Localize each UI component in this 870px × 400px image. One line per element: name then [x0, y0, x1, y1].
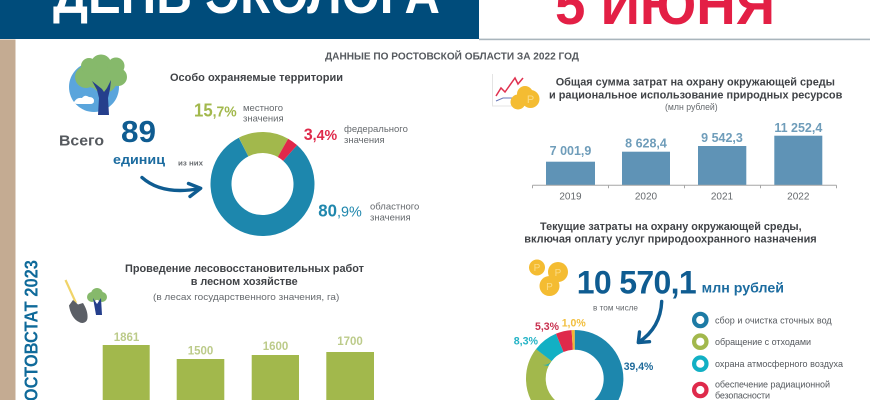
total label: Всего [59, 132, 104, 150]
bar chart: reforestation [103, 332, 374, 400]
heading: Особо охраняемые территории [170, 72, 343, 84]
bar chart: costs by year: 2020 [635, 192, 658, 202]
bar chart: costs by year: 2019 [559, 192, 582, 202]
panel: total environmental costs [492, 74, 843, 202]
subtitle: ДАННЫЕ ПО РОСТОВСКОЙ ОБЛАСТИ ЗА 2022 ГОД [325, 50, 579, 62]
donut labels: 8,3% [514, 335, 538, 347]
heading: включая оплату услуг природоохранного назначения [524, 234, 817, 246]
bar chart: costs by year: 2022 [787, 192, 810, 202]
bar chart: costs by year: 7 001,9 [550, 144, 591, 158]
label: regional 80,9%: 80,9% [318, 201, 362, 221]
heading: Проведение лесовосстановительных работ [125, 263, 365, 275]
unit note: (в лесах государственного значения, га) [153, 292, 339, 303]
legend [694, 314, 843, 400]
label: federal text: значения [344, 135, 385, 146]
heading: в лесном хозяйстве [191, 276, 298, 288]
heading: Текущие затраты на охрану окружающей среды, [540, 221, 802, 233]
donut chart: cost structure [520, 324, 629, 400]
small note: из них [178, 159, 204, 168]
bar chart: reforestation: 1700 [337, 336, 363, 348]
legend: обращение с отходами [715, 337, 811, 347]
panel: current costs [514, 221, 843, 400]
label: regional text: значения [370, 213, 411, 224]
bar chart: costs by year: 11 252,4 [774, 121, 822, 135]
icon: coins: Р [534, 263, 541, 274]
icon: shovel and tree [66, 280, 107, 323]
donut labels: 39,4% [624, 361, 653, 373]
note: в том числе [593, 303, 638, 313]
donut labels: 1,0% [562, 318, 586, 330]
panel: reforestation [66, 263, 374, 400]
bar chart: costs by year: 9 542,3 [701, 131, 743, 145]
icon: tree on globe [69, 54, 127, 115]
heading [549, 76, 843, 101]
arrow to donut [142, 178, 201, 196]
icon: chart and coins: Р [527, 94, 534, 106]
donut chart: protected territories [204, 125, 321, 243]
donut labels: 5,3% [535, 321, 559, 333]
icon: coins: Р [546, 282, 553, 293]
bar chart: costs by year: 2021 [711, 192, 734, 202]
panel: protected territories [59, 54, 419, 243]
legend: охрана атмосферного воздуха [715, 359, 843, 369]
unit note: (млн рублей) [665, 102, 718, 112]
bar chart: costs by year [532, 121, 836, 202]
big value: 10 570,1 [577, 264, 697, 300]
bar chart: reforestation: 1600 [263, 341, 288, 353]
label: regional text: областного [370, 202, 419, 212]
side stripe [0, 40, 16, 400]
bar chart: reforestation: 1500 [188, 346, 213, 358]
label: federal text: федерального [344, 124, 408, 135]
total value: 89 [121, 114, 156, 149]
label: federal 3,4%: 3,4% [304, 125, 337, 144]
label: local text: местного [243, 103, 283, 114]
value unit: млн рублей [702, 280, 784, 296]
legend: обеспечение радиационной [715, 380, 830, 390]
bar chart: reforestation: 1861 [114, 332, 140, 344]
label: local 15,7%: 15,7% [194, 101, 237, 121]
icon: coins: Р [555, 268, 562, 279]
heading [125, 263, 365, 288]
bar chart: costs by year: 8 628,4 [625, 136, 667, 150]
donut labels [514, 318, 653, 373]
label: local text: значения [243, 114, 284, 124]
legend: сбор и очистка сточных вод [715, 315, 832, 325]
icon: chart and coins [492, 74, 540, 110]
heading: Общая сумма затрат на охрану окружающей среды [556, 76, 835, 88]
icon: coins [529, 260, 568, 296]
heading: и рациональное использование природных ресурсов [549, 89, 843, 101]
total unit: единиц [113, 152, 165, 167]
header band: title [0, 0, 479, 39]
heading [524, 221, 817, 246]
arrow to donut [638, 302, 662, 342]
